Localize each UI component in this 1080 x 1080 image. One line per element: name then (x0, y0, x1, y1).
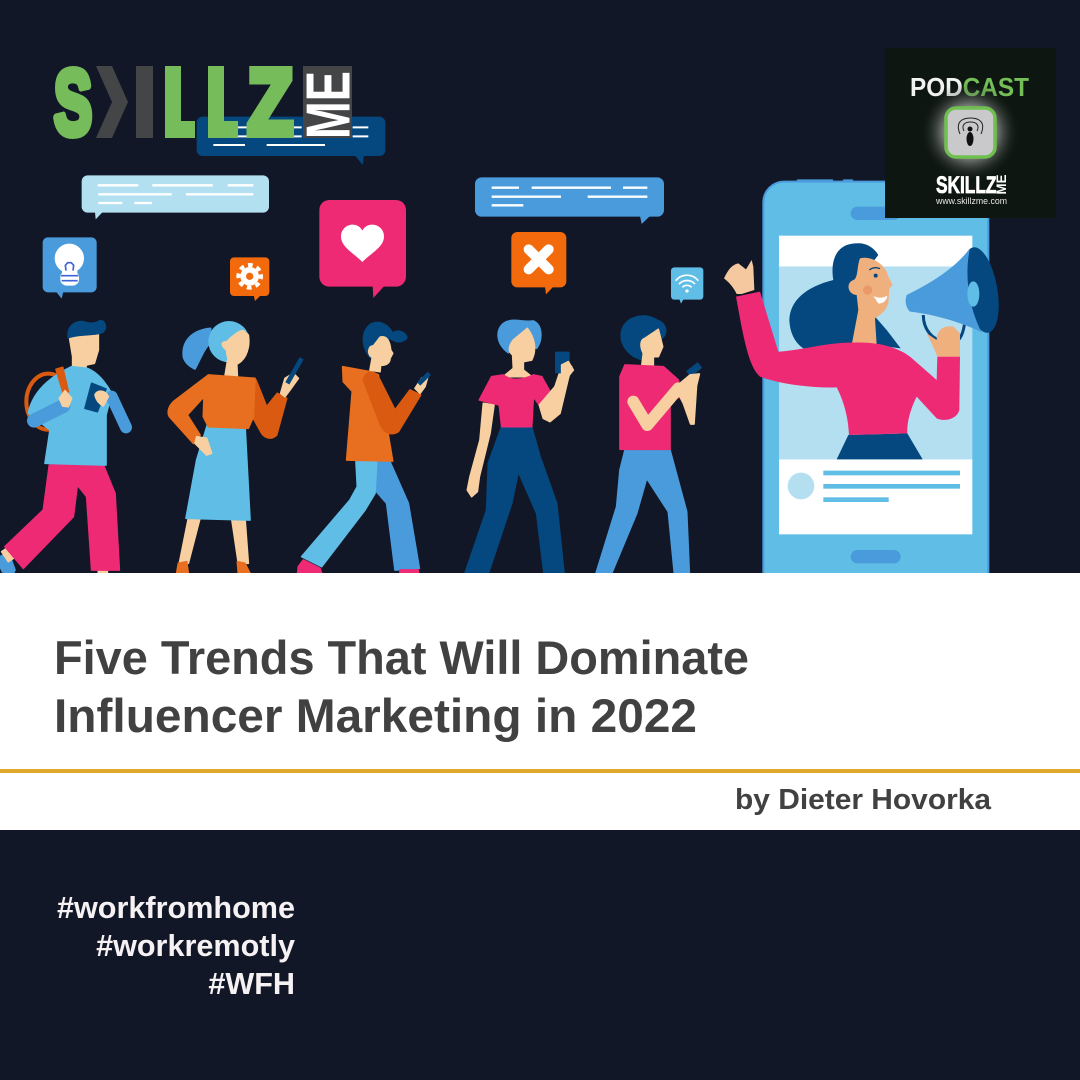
white title band (0, 573, 1080, 830)
podcast badge (885, 48, 1056, 218)
logo letter L: L (208, 50, 236, 155)
logo bar I (136, 66, 153, 138)
blue speech bubble and icons, centre (475, 177, 703, 304)
people, right two (465, 316, 700, 573)
phone body (763, 179, 988, 615)
hashtags (57, 891, 295, 1001)
title: Influencer Marketing in 2022 (54, 689, 697, 742)
hashtags: #WFH (208, 967, 295, 1001)
logo letter L: L (165, 50, 193, 155)
podcast heading: PODCAST (910, 72, 1029, 102)
phone screen post (779, 236, 972, 534)
hashtags: #workfromhome (57, 891, 295, 925)
title: Five Trends That Will Dominate (54, 631, 749, 684)
blue speech bubble (475, 177, 664, 224)
logo: SKILLZ ME (54, 50, 363, 155)
logo letter Z: Z (248, 50, 293, 154)
logo chevron K (96, 66, 128, 138)
hashtags: #workremotly (96, 929, 295, 963)
title (54, 631, 749, 742)
person 4: woman with short hair (465, 320, 573, 573)
author byline: by Dieter Hovorka (735, 784, 992, 816)
icon: heart bubble (319, 200, 406, 298)
small skillz logo: SKILLZ (936, 172, 997, 199)
people, left three (0, 321, 429, 573)
icon: light bulb bubble (43, 237, 97, 299)
small skillz logo: ME (994, 175, 1009, 194)
icon: cross bubble (511, 232, 566, 294)
light blue speech bubble (82, 175, 269, 219)
person 1: man with backpack (0, 321, 126, 573)
icon: gear bubble (230, 257, 269, 301)
logo ME box (303, 66, 352, 138)
icon: wifi bubble (671, 267, 703, 304)
person 5: woman with dark hair (596, 316, 700, 573)
badge background (885, 48, 1056, 218)
icon: podcast button (920, 82, 1020, 182)
logo ME text: ME (294, 71, 363, 139)
dark blue speech bubble (197, 117, 385, 165)
gold divider (0, 769, 1080, 773)
person 2: woman with ponytail (168, 321, 302, 573)
phone with influencer (724, 179, 1005, 615)
influencer woman with megaphone (724, 243, 1005, 459)
speech bubbles and icons, left (43, 117, 406, 301)
person 3: man in hoodie (298, 322, 429, 573)
website url: www.skillzme.com (935, 196, 1007, 207)
logo letter S: S (54, 52, 92, 154)
